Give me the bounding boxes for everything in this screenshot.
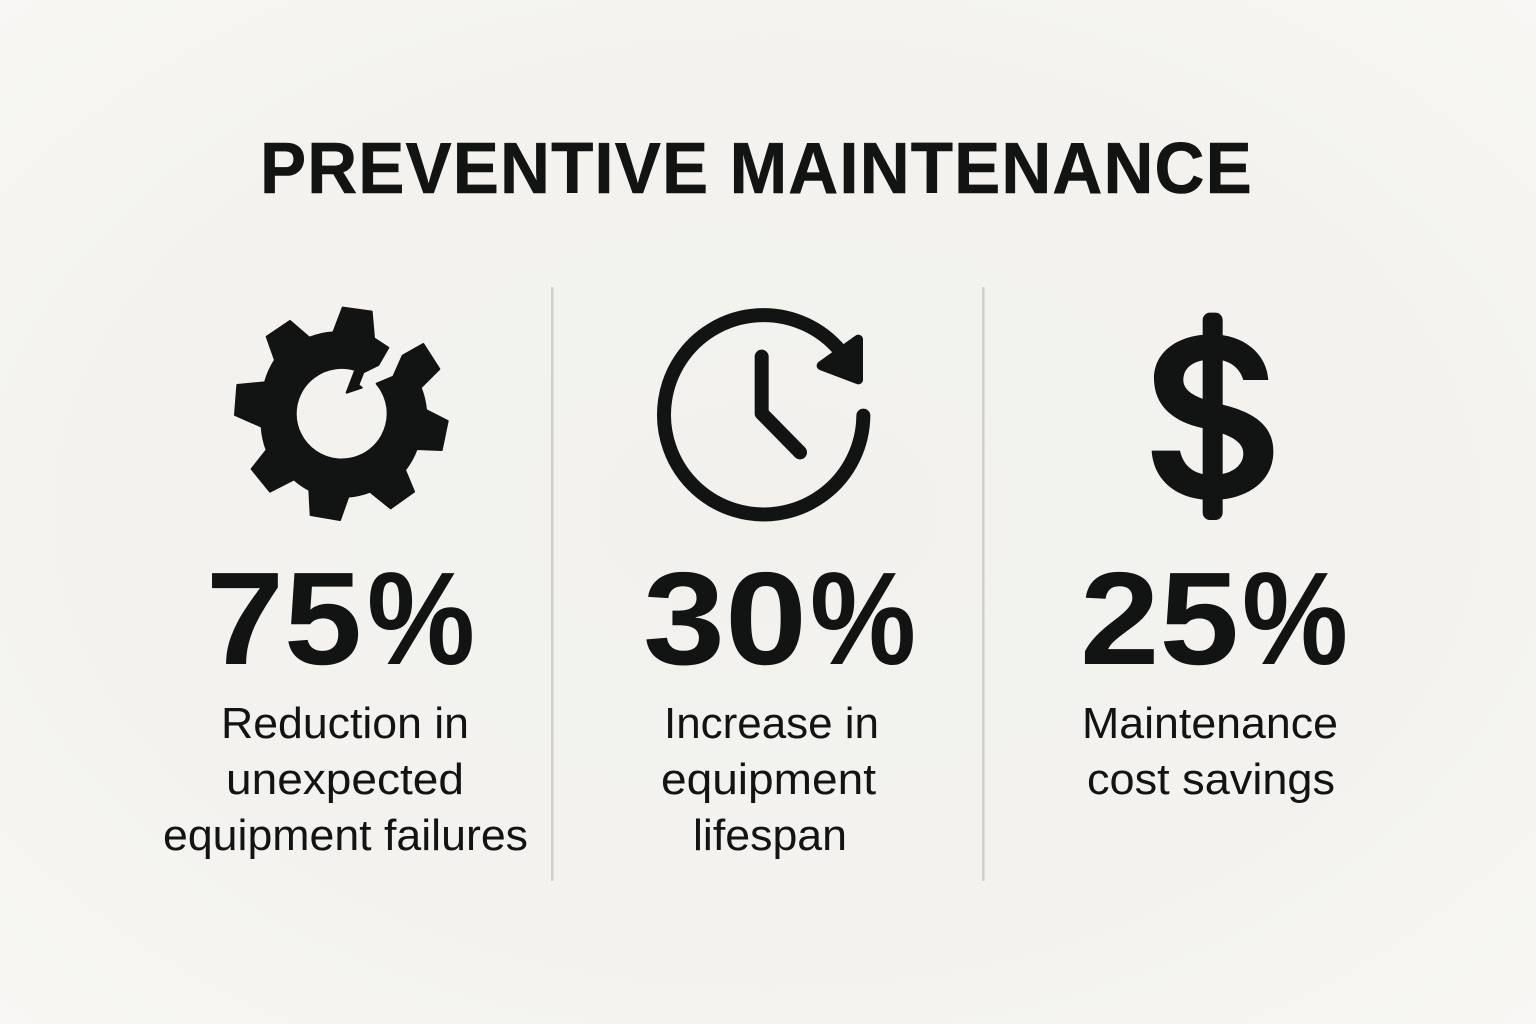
icon: clock with circular arrow xyxy=(664,315,863,514)
stat: 30% xyxy=(643,545,916,692)
description: reduction in failures: unexpected xyxy=(226,755,464,804)
stat: 25%: % xyxy=(1242,545,1348,692)
description: maintenance cost savings: Maintenance xyxy=(1082,699,1338,748)
stat: 30%: 30 xyxy=(643,545,807,692)
stat: 75%: % xyxy=(367,545,475,692)
description: increase in lifespan: lifespan xyxy=(693,811,847,860)
icon: dollar sign xyxy=(1152,313,1273,520)
stat: 30%: % xyxy=(810,545,916,692)
panel: equipment lifespan xyxy=(643,315,916,860)
description: reduction in failures: Reduction in xyxy=(221,699,469,748)
description: maintenance cost savings xyxy=(1082,699,1338,804)
stat: 25% xyxy=(1080,545,1348,692)
icon: broken gear xyxy=(235,308,448,520)
stat: 75% xyxy=(206,545,475,692)
panel: cost savings xyxy=(1080,313,1348,804)
title: PREVENTIVE MAINTENANCE xyxy=(260,128,1252,208)
description: increase in lifespan: Increase in xyxy=(664,699,879,748)
stat: 75%: 75 xyxy=(206,545,362,692)
panel: unexpected failures xyxy=(163,308,528,860)
description: increase in lifespan xyxy=(661,699,879,860)
description: reduction in failures: equipment failures xyxy=(163,811,528,860)
description: increase in lifespan: equipment xyxy=(661,755,876,804)
description: reduction in failures xyxy=(163,699,528,860)
description: maintenance cost savings: cost savings xyxy=(1087,755,1335,804)
stat: 25%: 25 xyxy=(1080,545,1239,692)
